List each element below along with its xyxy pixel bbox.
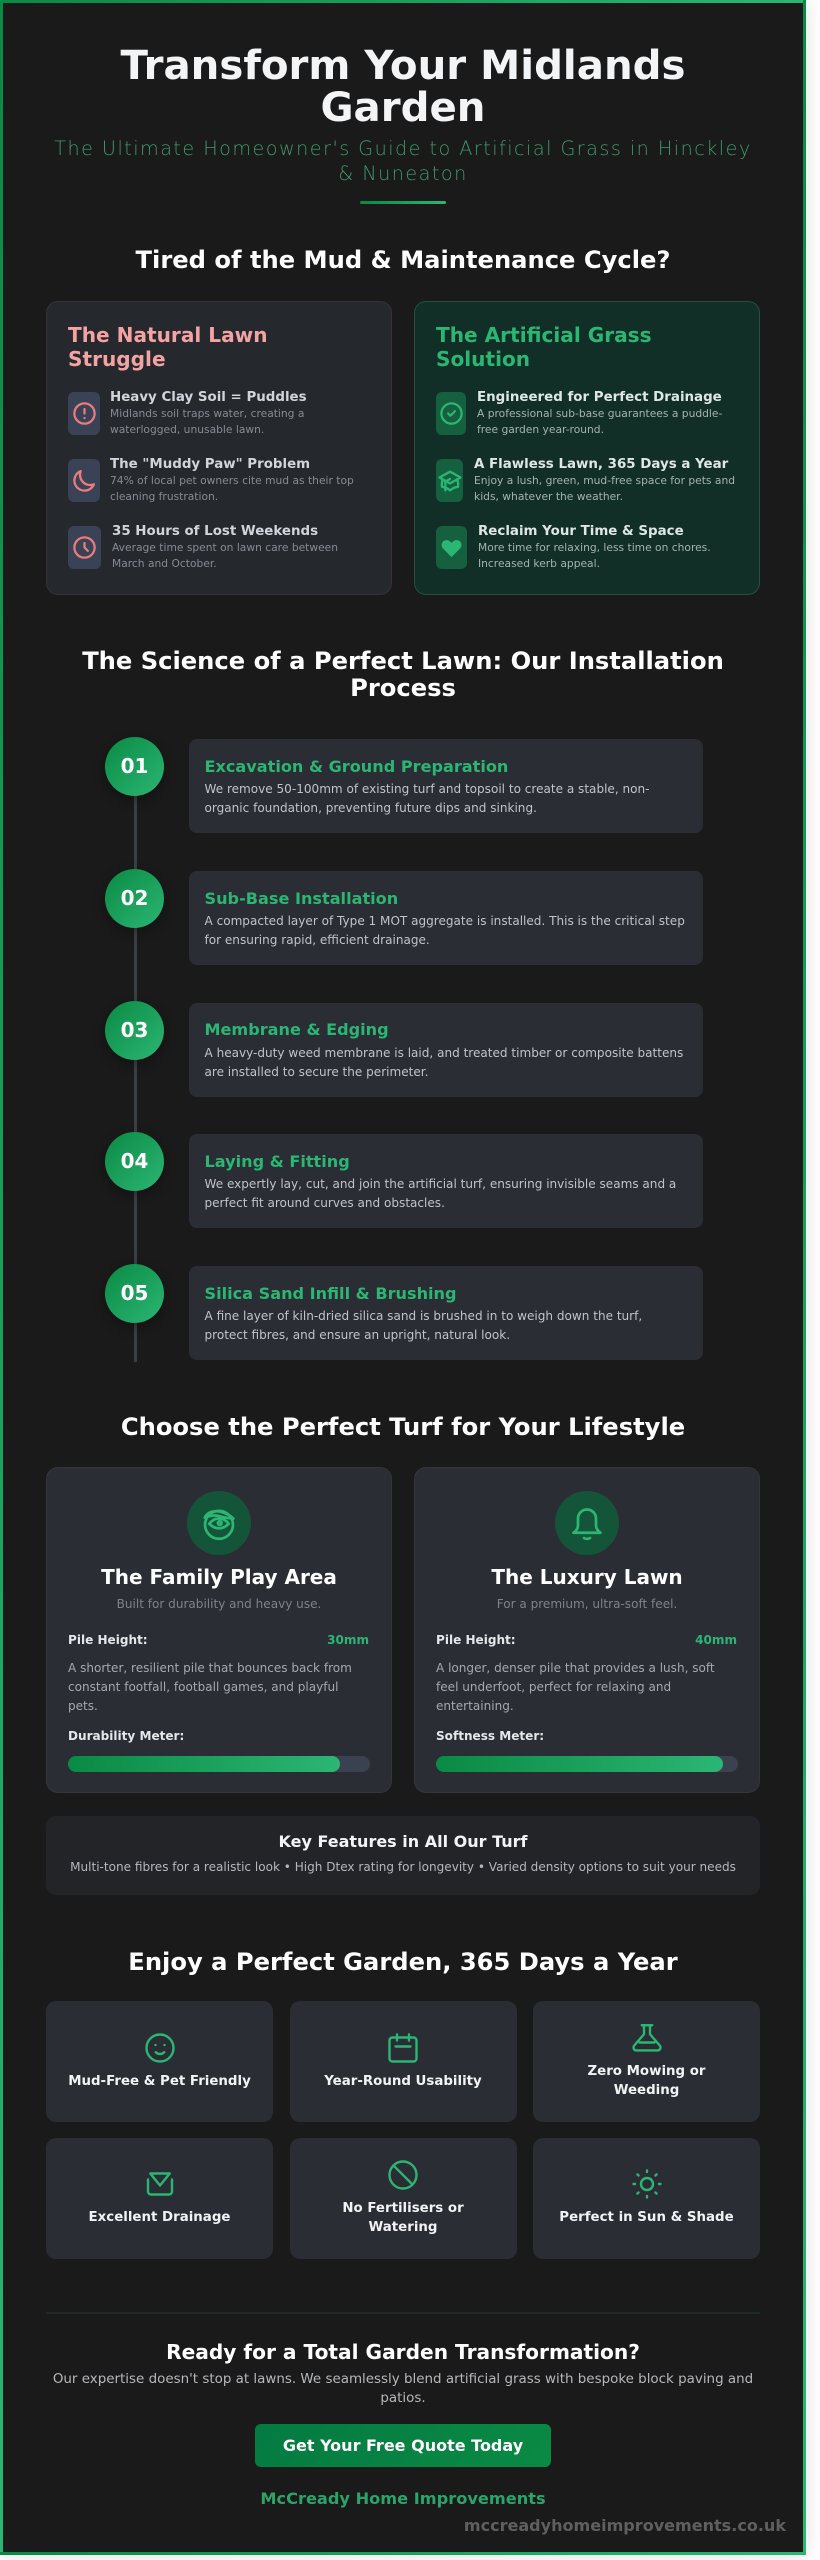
step card 02: Sub-Base Installation	[204, 888, 398, 908]
step card 02: A compacted layer of Type 1 MOT aggregate is installed. This is the critical step	[204, 914, 685, 928]
step number 01	[105, 737, 164, 796]
panel heading	[436, 322, 652, 371]
description	[436, 1661, 715, 1713]
benefit tile: year-round	[290, 2001, 516, 2122]
item text: March and October.	[112, 557, 217, 570]
icon: heart	[436, 526, 467, 569]
step number 03: 03	[121, 1018, 148, 1042]
card subtitle: Built for durability and heavy use.	[117, 1597, 321, 1611]
title: Transform Your Midlands	[121, 42, 685, 89]
panel: luxury lawn	[414, 1467, 760, 1793]
panel: key features	[46, 1816, 760, 1895]
item text: 74% of local pet owners cite mud as their top	[110, 474, 354, 487]
benefit tile: zero mowing: Weeding	[614, 2083, 679, 2098]
description: A shorter, resilient pile that bounces back from	[68, 1661, 352, 1675]
item text	[477, 407, 722, 436]
item text	[110, 407, 304, 436]
durability meter	[68, 1756, 370, 1772]
pile height label: Pile Height:	[68, 1632, 148, 1646]
heading: installation process	[82, 647, 724, 702]
icon: cap	[436, 459, 463, 502]
benefit tile: zero mowing: Zero Mowing or	[587, 2064, 706, 2079]
accent bar	[360, 201, 446, 204]
icon: family play	[187, 1491, 251, 1555]
process timeline	[105, 737, 703, 1362]
step card 01	[188, 739, 703, 833]
step card 04: Laying & Fitting	[204, 1152, 350, 1170]
panel heading: The Artificial Grass	[436, 322, 652, 346]
icon: bell	[555, 1491, 619, 1555]
step card 03: Membrane & Edging	[204, 1020, 389, 1039]
heading: mud and maintenance: Tired of the Mud & Maintenance Cycle?	[136, 246, 670, 274]
title: Garden	[320, 84, 486, 131]
step number 03	[105, 1000, 164, 1060]
cta button: Get Your Free Quote Today	[283, 2436, 523, 2455]
item heading: Reclaim Your Time & Space	[478, 524, 684, 539]
subtitle: The Ultimate Homeowner's Guide to Artificial Grass in Hinckley	[54, 137, 752, 160]
icon: exclamation	[68, 392, 100, 435]
description	[68, 1661, 352, 1713]
icon: clock	[68, 526, 101, 569]
description: entertaining.	[436, 1699, 514, 1713]
step card 05: A fine layer of kiln-dried silica sand is brushed in to weigh down the turf,	[204, 1309, 642, 1323]
item heading: The "Muddy Paw" Problem	[110, 457, 310, 472]
icon: check	[436, 392, 466, 435]
item heading: Heavy Clay Soil = Puddles	[110, 390, 307, 405]
pile height value: 30mm	[327, 1632, 369, 1646]
panel: family play area	[46, 1467, 392, 1793]
heading: choose turf: Choose the Perfect Turf for Your Lifestyle	[121, 1413, 685, 1441]
benefit tile: mud-free	[46, 2001, 273, 2122]
panel heading: The Natural Lawn	[68, 322, 268, 346]
item text: waterlogged, unusable lawn.	[110, 423, 264, 436]
step number 04	[105, 1132, 164, 1191]
step number 04: 04	[121, 1149, 148, 1173]
item text: Midlands soil traps water, creating a	[110, 407, 304, 420]
title	[120, 42, 685, 131]
item text: Increased kerb appeal.	[478, 557, 600, 570]
step card 02: for ensuring rapid, efficient drainage.	[204, 933, 430, 947]
subtitle	[54, 137, 752, 184]
heading: installation process: Process	[350, 674, 456, 702]
step card 05: protect fibres, and ensure an upright, natural look.	[204, 1328, 510, 1342]
benefit tile: no fertilisers: No Fertilisers or	[342, 2201, 464, 2216]
step card 03	[188, 1002, 703, 1096]
benefit tile: sun and shade: Perfect in Sun & Shade	[559, 2210, 734, 2225]
step number 01: 01	[121, 754, 148, 778]
pile height value: 40mm	[695, 1632, 737, 1646]
item text: kids, whatever the weather.	[474, 490, 623, 503]
panel heading: Solution	[436, 347, 530, 371]
meter label: Softness Meter:	[436, 1728, 544, 1742]
item text: cleaning frustration.	[110, 490, 218, 503]
item heading: A Flawless Lawn, 365 Days a Year	[474, 457, 728, 472]
pile height label: Pile Height:	[436, 1632, 516, 1646]
item text: Average time spent on lawn care between	[112, 541, 338, 554]
cta heading: Ready for a Total Garden Transformation?	[166, 2340, 640, 2364]
step card 02	[188, 871, 703, 965]
step number 02	[105, 869, 164, 928]
step card 04	[188, 1134, 703, 1228]
panel heading	[68, 322, 268, 371]
step card 01: organic foundation, preventing future dips and sinking.	[204, 801, 537, 815]
step card 03: A heavy-duty weed membrane is laid, and treated timber or composite battens	[204, 1046, 683, 1060]
item text	[112, 541, 338, 570]
item heading: 35 Hours of Lost Weekends	[112, 524, 318, 539]
step card 05: Silica Sand Infill & Brushing	[204, 1284, 457, 1302]
panel heading: Struggle	[68, 347, 166, 371]
panel: natural lawn struggle	[46, 301, 392, 595]
benefit tile: zero mowing	[533, 2001, 760, 2122]
benefit tile: drainage: Excellent Drainage	[89, 2210, 230, 2225]
item heading: Engineered for Perfect Drainage	[477, 390, 722, 405]
card title: The Luxury Lawn	[491, 1565, 683, 1589]
cta text	[53, 2372, 753, 2406]
item text	[474, 474, 735, 503]
heading: installation process: The Science of a Perfect Lawn: Our Installation	[82, 647, 724, 675]
benefit tile: no fertilisers: Watering	[369, 2220, 437, 2235]
step card 01: Excavation & Ground Preparation	[204, 756, 508, 776]
step card 04: perfect fit around curves and obstacles.	[204, 1196, 445, 1210]
description: A longer, denser pile that provides a lush, soft	[436, 1661, 715, 1675]
benefit tile: sun and shade	[533, 2138, 760, 2259]
cta text: patios.	[380, 2391, 426, 2406]
card title: The Family Play Area	[101, 1565, 337, 1589]
cta button	[255, 2424, 551, 2467]
item text: Enjoy a lush, green, mud-free space for pets and	[474, 474, 735, 487]
step number 05: 05	[121, 1281, 148, 1305]
item text: A professional sub-base guarantees a puddle-	[477, 407, 722, 420]
description: constant footfall, football games, and playful	[68, 1680, 338, 1694]
brand name: McCready Home Improvements	[260, 2489, 546, 2508]
subtitle: & Nuneaton	[338, 162, 468, 184]
step card 03: are installed to secure the perimeter.	[204, 1064, 428, 1078]
description: feel underfoot, perfect for relaxing and	[436, 1680, 671, 1694]
key features heading: Key Features in All Our Turf	[278, 1832, 528, 1851]
benefit tile: no fertilisers	[290, 2138, 516, 2259]
step card 01: We remove 50-100mm of existing turf and topsoil to create a stable, non-	[204, 782, 650, 796]
website: mccreadyhomeimprovements.co.uk	[464, 2516, 786, 2535]
item text: free garden year-round.	[477, 423, 604, 436]
benefit tile: year-round: Year-Round Usability	[324, 2074, 482, 2089]
step card 04: We expertly lay, cut, and join the artificial turf, ensuring invisible seams and a	[204, 1177, 676, 1191]
meter label: Durability Meter:	[68, 1728, 184, 1742]
step number 02: 02	[121, 886, 148, 910]
card subtitle: For a premium, ultra-soft feel.	[497, 1597, 677, 1611]
item text	[110, 474, 354, 503]
benefit tile: drainage	[46, 2138, 273, 2259]
key features list: Multi-tone fibres for a realistic look • High Dtex rating for longevity • Varied density options to suit your needs	[70, 1860, 736, 1874]
softness meter	[436, 1756, 738, 1772]
step number 05	[105, 1264, 164, 1323]
step card 05	[188, 1266, 703, 1360]
item text	[478, 541, 711, 570]
panel: artificial grass solution	[414, 301, 760, 595]
heading: enjoy: Enjoy a Perfect Garden, 365 Days a Year	[128, 1948, 678, 1976]
cta text: Our expertise doesn't stop at lawns. We seamlessly blend artificial grass with bespoke block paving and	[53, 2372, 753, 2387]
description: pets.	[68, 1699, 98, 1713]
icon: moon	[68, 459, 100, 502]
benefit tile: mud-free: Mud-Free & Pet Friendly	[68, 2074, 251, 2089]
item text: More time for relaxing, less time on chores.	[478, 541, 711, 554]
